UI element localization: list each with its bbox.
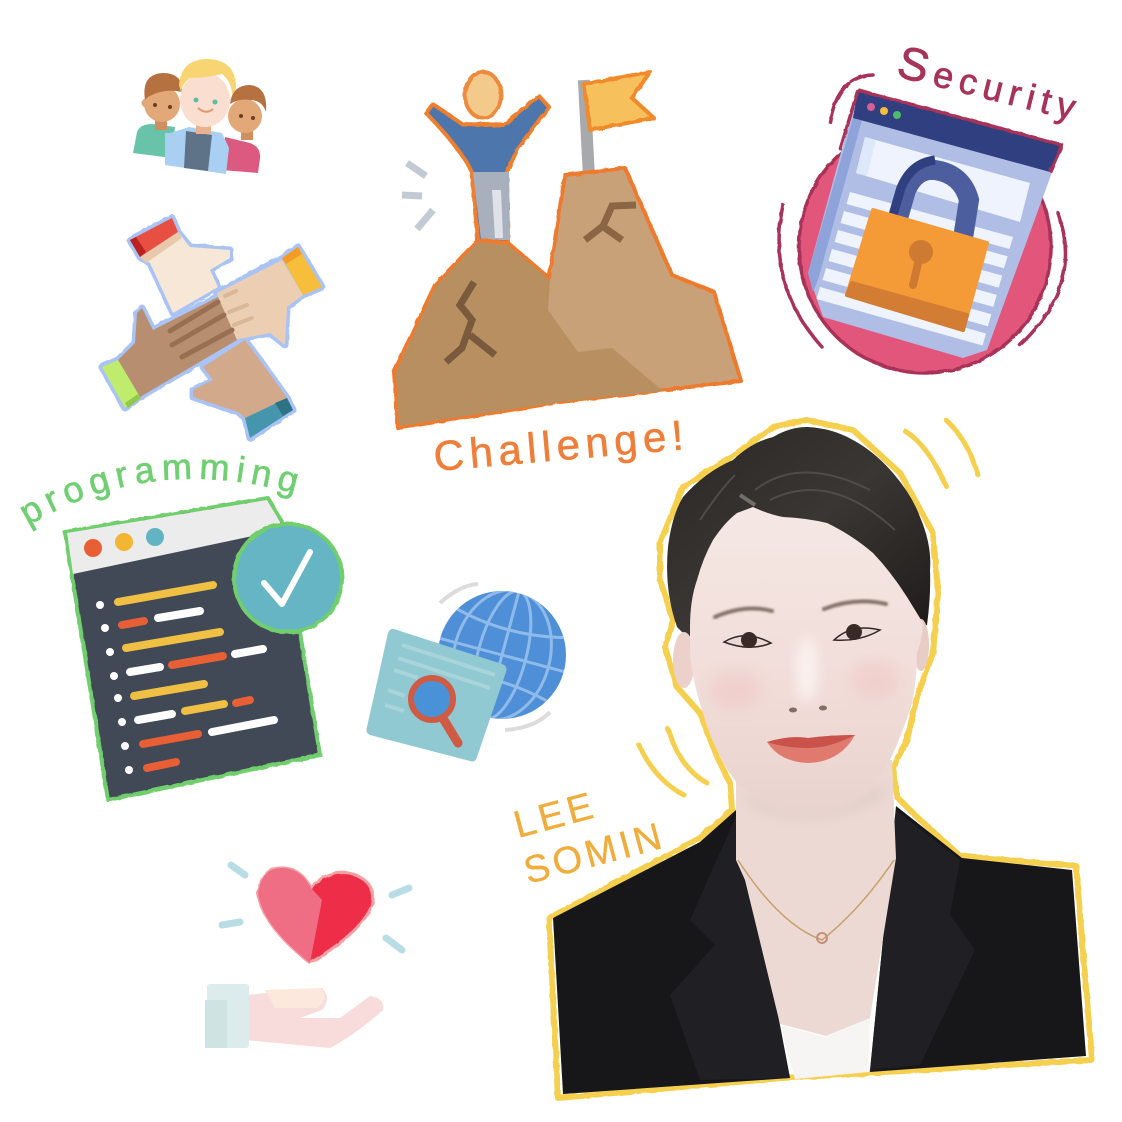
icon: mountain challenge [394, 72, 741, 428]
open hand [205, 984, 383, 1048]
jacket [553, 810, 790, 1094]
yellow crayon outline [549, 420, 1092, 1098]
icon: heart in hand [205, 865, 409, 1048]
icon: globe search [366, 582, 566, 762]
hair strands [700, 472, 895, 530]
check badge [234, 524, 342, 632]
label: name: LEE [509, 784, 601, 847]
icon: code window with check badge [65, 498, 342, 800]
browser window [808, 90, 1062, 358]
neck shadow [745, 780, 885, 820]
motion marks [402, 163, 433, 229]
sparkles [222, 865, 409, 950]
label: programming: programming [20, 456, 298, 532]
white shirt [780, 1018, 870, 1079]
nose [796, 638, 818, 702]
mountains [394, 168, 741, 428]
cheeks [709, 670, 761, 710]
portrait with yellow outline [549, 420, 1092, 1098]
label: challenge: Challenge! [432, 411, 691, 480]
icon: security lock on web page [779, 75, 1066, 373]
icon: team of three people [133, 59, 266, 174]
eyebrows [715, 601, 886, 617]
label: security: Security [893, 35, 1088, 131]
flag [578, 72, 654, 175]
label: name: SOMIN [519, 815, 670, 893]
face [690, 507, 923, 812]
code lines [118, 585, 274, 768]
lips [767, 735, 855, 763]
icon: stacked team hands [102, 218, 322, 438]
padlock [847, 160, 987, 330]
label: name [509, 784, 670, 893]
motion marks around portrait [639, 420, 978, 795]
motion arcs [779, 75, 1066, 347]
neck and chest [736, 760, 896, 1036]
ears [673, 632, 695, 688]
hair [667, 427, 930, 640]
person on summit [426, 72, 549, 248]
eyes [724, 624, 880, 648]
